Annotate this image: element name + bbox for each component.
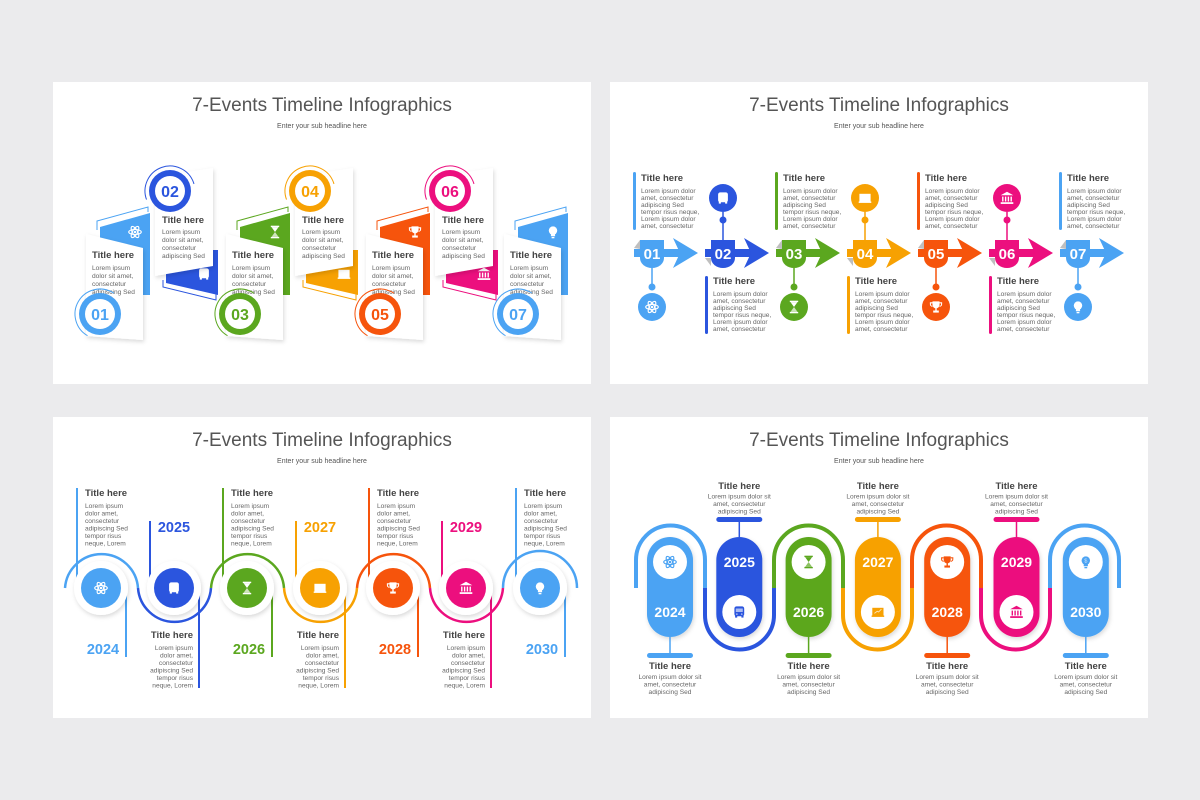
item 01: consectetur [92,281,127,288]
step 02 [705,184,771,334]
pill 2030: adipiscing Sed [1064,689,1108,696]
step 01: amet, consectetur [641,195,694,202]
step 06: Lorem ipsum dolor [997,291,1052,298]
year 2024: adipiscing Sed [85,526,128,532]
year 2027: consectetur [305,660,340,667]
step 05: Title here [925,173,967,184]
item 06: dolor sit amet, [442,237,484,244]
subtitle: Enter your sub headline here [277,458,367,465]
year 2025: adipiscing Sed [150,668,193,674]
step 06: tempor risus neque, [997,312,1055,319]
step 03: adipiscing Sed [783,202,826,209]
item 05 [346,207,430,348]
step 05: 05 [928,246,944,263]
step 04 [847,184,913,334]
year 2030: 2030 [526,642,558,658]
pill 2029: 2029 [1001,554,1032,570]
item 04: 04 [301,184,319,201]
item 06: adipiscing Sed [442,253,485,260]
panel: top-right [610,82,1148,384]
item 07: Lorem ipsum [510,265,549,272]
pill 2028: Lorem ipsum dolor sit [916,674,979,681]
step 06: adipiscing Sed [997,305,1040,312]
year 2027: tempor risus [303,675,340,682]
item 03 [206,207,290,348]
step 03: Lorem ipsum dolor [783,188,838,195]
pill 2027: adipiscing Sed [856,508,900,516]
panel: top-left [53,82,591,384]
item 02: adipiscing Sed [162,253,205,260]
year 2030: neque, Lorem [524,540,565,548]
wave line [65,551,577,622]
item 03: Title here [232,250,274,261]
item 04: consectetur [302,245,337,252]
pill 2024 [638,537,702,696]
step 03: amet, consectetur [783,223,836,230]
year 2027: Lorem ipsum [301,645,339,652]
step 05: amet, consectetur [925,195,978,202]
year 2025: tempor risus [157,675,194,682]
pill 2027: Lorem ipsum dolor sit [846,494,910,500]
item 06: Title here [442,215,484,226]
pill 2030: Lorem ipsum dolor sit [1054,674,1117,681]
step 07: adipiscing Sed [1067,202,1110,209]
step 01: Lorem ipsum dolor [641,188,696,195]
step 01 [633,172,699,321]
subtitle: Enter your sub headline here [834,123,924,130]
year 2025: dolor amet, [160,652,193,660]
pill 2024: Lorem ipsum dolor sit [638,674,702,681]
pill 2029: Lorem ipsum dolor sit [985,494,1048,500]
pill 2024: Title here [649,661,691,672]
pill 2026: amet, consectetur [782,682,836,688]
step 01: adipiscing Sed [641,202,684,209]
pill 2028 [916,537,979,696]
step 03: Lorem ipsum dolor [783,216,838,223]
year 2029: neque, Lorem [444,682,485,690]
pill 2027: 2027 [862,554,894,570]
step 06: amet, consectetur [997,326,1050,333]
loop line [636,526,1119,650]
year 2029: dolor amet, [452,652,485,660]
year 2024 [74,488,128,658]
step 02: adipiscing Sed [713,305,756,312]
step 06: 06 [999,246,1015,263]
item 04: Lorem ipsum [302,229,341,236]
step 02: amet, consectetur [713,326,766,333]
pill 2025: amet, consectetur [713,501,766,508]
item 01: Title here [92,250,134,261]
item 01: Lorem ipsum [92,265,131,272]
item 04 [278,159,358,300]
year 2024: tempor risus [85,533,122,540]
step 05: Lorem ipsum dolor [925,188,980,195]
year 2028: Lorem ipsum [377,503,416,510]
year 2025: consectetur [159,660,194,667]
step 03: Title here [783,173,825,184]
pill 2025: Lorem ipsum dolor sit [708,494,771,500]
year 2028: dolor amet, [377,510,410,518]
step 06: amet, consectetur [997,298,1050,305]
year 2028: consectetur [377,518,412,525]
item 06: consectetur [442,245,477,252]
year 2025: Lorem ipsum [155,645,193,652]
year 2028: 2028 [379,642,411,658]
step 05: tempor risus neque, [925,209,983,216]
step 07: tempor risus neque, [1067,209,1125,216]
panel: bottom-right [610,417,1148,718]
item 02: 02 [161,184,179,201]
year 2027: 2027 [304,520,336,536]
item 06: Lorem ipsum [442,229,481,236]
year 2030: tempor risus [524,533,561,540]
item 05: adipiscing Sed [372,289,415,296]
year 2024: Title here [85,488,127,499]
item 07: consectetur [510,281,545,288]
step 04: 04 [857,246,874,263]
step 04: amet, consectetur [855,298,908,305]
item 05: dolor sit amet, [372,273,414,280]
pill 2028: Title here [926,661,968,672]
step 04: amet, consectetur [855,326,908,333]
item 06 [418,159,498,300]
step 01: Title here [641,173,683,184]
year 2029: adipiscing Sed [442,668,485,674]
step 05: adipiscing Sed [925,202,968,209]
item 05: 05 [371,307,389,324]
title: 7-Events Timeline Infographics [192,430,452,451]
step 07: Lorem ipsum dolor [1067,188,1122,195]
title: 7-Events Timeline Infographics [749,430,1009,451]
item 07: 07 [509,307,527,324]
item 02: Title here [162,215,204,226]
step 01: amet, consectetur [641,223,694,230]
step 07: 07 [1070,246,1086,263]
subtitle: Enter your sub headline here [277,123,367,130]
pill 2024: amet, consectetur [644,682,697,688]
step 03: 03 [786,246,802,263]
step 07: Lorem ipsum dolor [1067,216,1122,223]
step 06: Lorem ipsum dolor [997,319,1052,326]
step 07: amet, consectetur [1067,195,1120,202]
item 05: consectetur [372,281,407,288]
pill 2024: 2024 [654,604,686,620]
year 2027: dolor amet, [306,652,339,660]
pill 2028: amet, consectetur [921,682,974,688]
year 2024: dolor amet, [85,510,118,518]
pill 2029: Title here [995,481,1038,492]
item 05: Title here [372,250,414,261]
title: 7-Events Timeline Infographics [749,95,1009,116]
pill 2025: adipiscing Sed [718,508,761,516]
year 2029: Lorem ipsum [447,645,485,652]
year 2029 [439,520,493,690]
year 2030: adipiscing Sed [524,526,567,532]
item 01 [66,207,150,348]
year 2025: Title here [151,630,193,641]
step 04: Title here [855,276,897,287]
year 2024: neque, Lorem [85,540,126,548]
step 02: Lorem ipsum dolor [713,319,768,326]
year 2026: dolor amet, [231,510,264,518]
step 06 [989,184,1055,334]
item 01: adipiscing Sed [92,289,135,296]
panel: bottom-left [53,417,591,718]
year 2026: 2026 [233,642,265,658]
year 2030: Lorem ipsum [524,503,563,510]
pill 2028: adipiscing Sed [926,689,969,696]
step 02: 02 [715,246,731,263]
year 2024: Lorem ipsum [85,503,124,510]
year 2024: consectetur [85,518,120,525]
item 07: Title here [510,250,552,261]
step 07 [1059,172,1125,321]
step 02: Lorem ipsum dolor [713,291,768,298]
pill 2026: 2026 [793,604,824,620]
item 04: Title here [302,215,344,226]
pill 2030: 2030 [1070,604,1102,620]
year 2029: tempor risus [449,675,486,682]
step 04: tempor risus neque, [855,312,913,319]
year 2028: tempor risus [377,533,414,540]
year 2028: neque, Lorem [377,540,418,548]
step 02: Title here [713,276,755,287]
pill 2026: Title here [788,661,830,672]
step 07: Title here [1067,173,1109,184]
year 2026: Lorem ipsum [231,503,270,510]
step 07: amet, consectetur [1067,223,1120,230]
step 05: Lorem ipsum dolor [925,216,980,223]
item 02: dolor sit amet, [162,237,204,244]
item 03: consectetur [232,281,267,288]
title: 7-Events Timeline Infographics [192,95,452,116]
step 03 [775,172,841,321]
item 01: dolor sit amet, [92,273,134,280]
item 03: adipiscing Sed [232,289,275,296]
year 2027 [293,520,347,690]
step 06: Title here [997,276,1039,287]
step 04: Lorem ipsum dolor [855,291,910,298]
pill 2025: Title here [718,481,760,492]
year 2026: adipiscing Sed [231,526,274,532]
pill 2028: 2028 [932,604,963,620]
pill 2026: Lorem ipsum dolor sit [777,674,840,681]
year 2029: consectetur [451,660,486,667]
pill 2025 [708,481,771,637]
year 2029: Title here [443,630,485,641]
year 2025: neque, Lorem [152,682,193,690]
item 07: adipiscing Sed [510,289,553,296]
step 02: tempor risus neque, [713,312,771,319]
year 2025: 2025 [158,520,190,536]
item 04: dolor sit amet, [302,237,344,244]
year 2028: Title here [377,488,419,499]
year 2027: Title here [297,630,339,641]
pill 2029: adipiscing Sed [995,508,1038,516]
pill 2027: Title here [857,481,899,492]
step 05 [917,172,983,321]
item 06: 06 [441,184,459,201]
pill 2027: amet, consectetur [852,501,905,508]
step 03: amet, consectetur [783,195,836,202]
pill 2026 [777,537,840,696]
subtitle: Enter your sub headline here [834,458,924,465]
step 05: amet, consectetur [925,223,978,230]
pill 2030 [1054,537,1117,696]
pill 2025: 2025 [724,554,755,570]
item 04: adipiscing Sed [302,253,345,260]
pill 2030: amet, consectetur [1060,682,1113,688]
step 04: Lorem ipsum dolor [855,319,910,326]
year 2025 [147,520,201,690]
step 01: Lorem ipsum dolor [641,216,696,223]
year 2026: tempor risus [231,533,268,540]
item 07: dolor sit amet, [510,273,552,280]
item 05: Lorem ipsum [372,265,411,272]
pill 2029: amet, consectetur [990,501,1044,508]
year 2030 [513,488,567,658]
year 2029: 2029 [450,520,482,536]
year 2027: adipiscing Sed [296,668,339,674]
item 01: 01 [91,307,109,324]
item 02: Lorem ipsum [162,229,201,236]
item 02: consectetur [162,245,197,252]
step 03: tempor risus neque, [783,209,841,216]
item 07 [484,207,568,348]
step 04: adipiscing Sed [855,305,898,312]
year 2026: neque, Lorem [231,540,272,548]
pill 2029 [985,481,1048,637]
year 2024: 2024 [87,642,119,658]
year 2026: consectetur [231,518,266,525]
year 2028: adipiscing Sed [377,526,420,532]
year 2028 [366,488,420,658]
step 01: tempor risus neque, [641,209,699,216]
year 2027: neque, Lorem [298,682,339,690]
step 02: amet, consectetur [713,298,766,305]
year 2030: consectetur [524,518,559,525]
item 02 [138,159,218,300]
year 2026: Title here [231,488,273,499]
year 2030: Title here [524,488,566,499]
year 2026 [220,488,274,658]
item 03: Lorem ipsum [232,265,271,272]
pill 2026: adipiscing Sed [787,689,830,696]
pill 2024: adipiscing Sed [649,689,692,696]
item 03: 03 [231,307,249,324]
item 03: dolor sit amet, [232,273,274,280]
pill 2030: Title here [1065,661,1107,672]
step 01: 01 [644,246,660,263]
year 2030: dolor amet, [524,510,557,518]
pill 2027 [846,481,910,637]
